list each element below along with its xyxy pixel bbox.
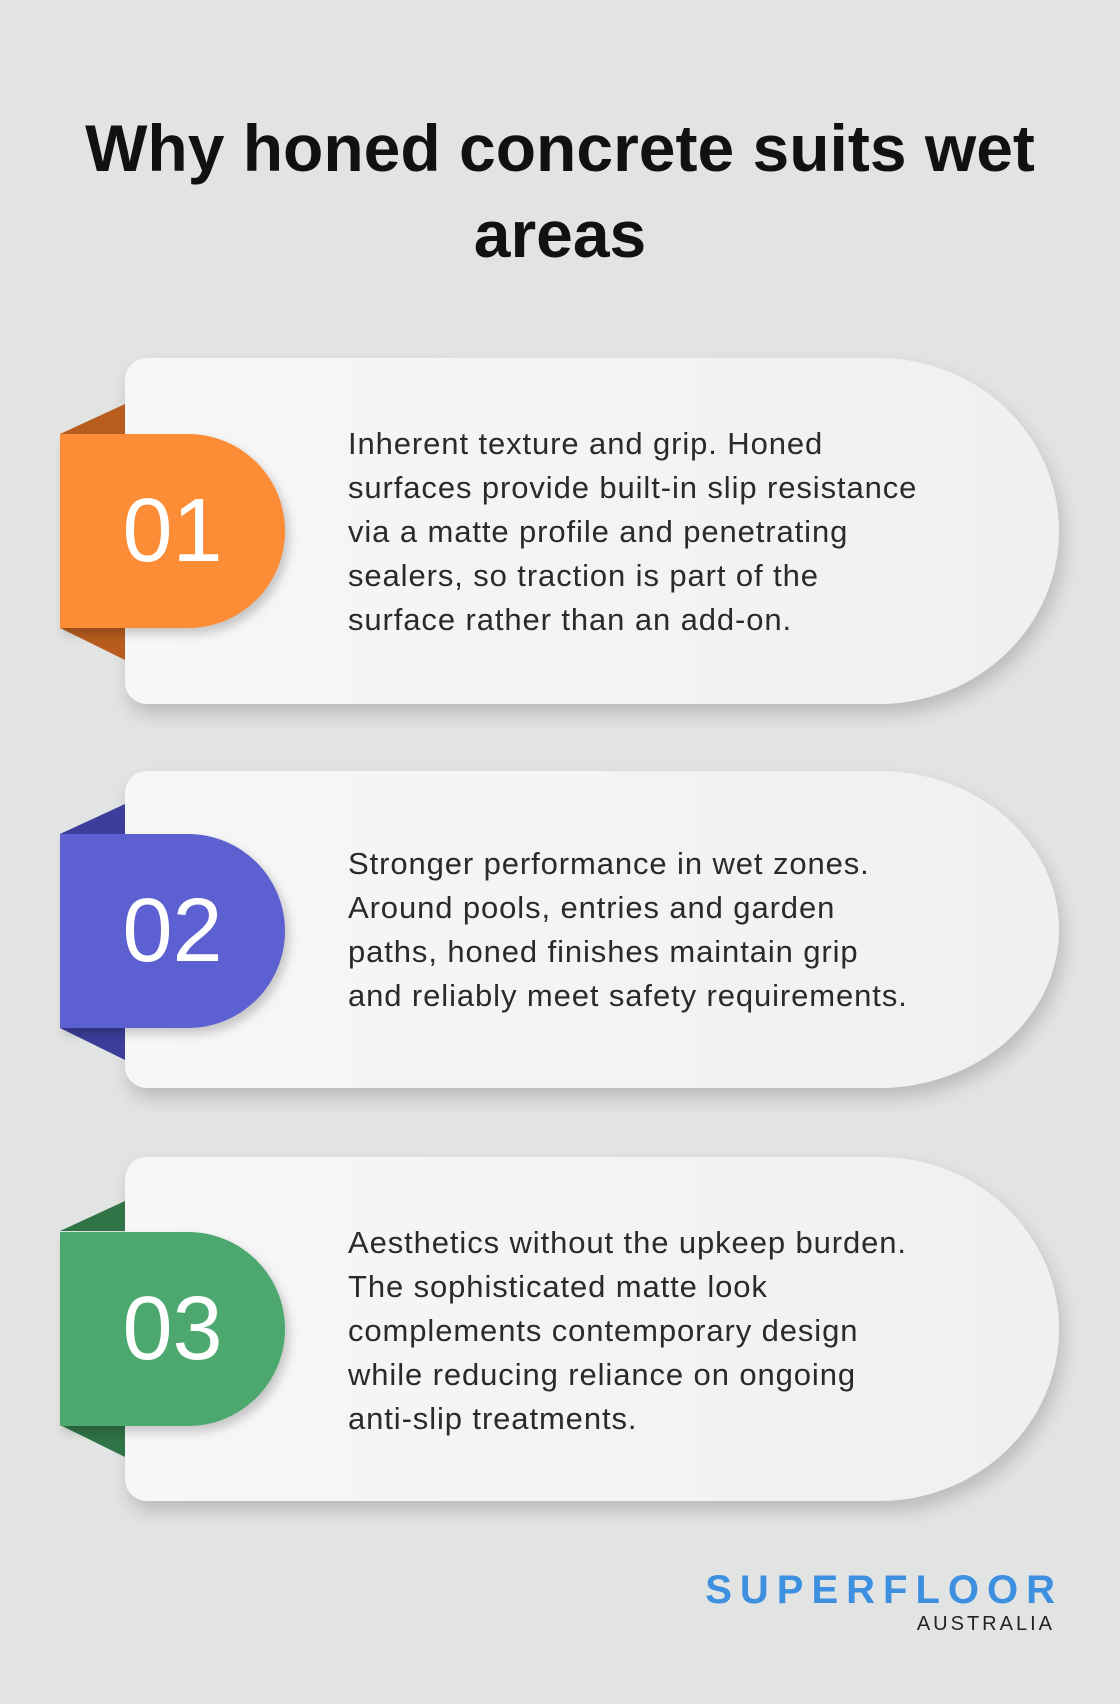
badge: 01 xyxy=(60,434,285,628)
logo xyxy=(705,1568,1063,1635)
badge: 02 xyxy=(60,834,285,1028)
text: item 3: Aesthetics without the upkeep burden. xyxy=(348,1225,907,1260)
text: item 2: Stronger performance in wet zones. xyxy=(348,846,870,881)
panel: item 2 xyxy=(125,771,1059,1088)
title: Why honed concrete suits wet xyxy=(85,111,1035,185)
badge: 01: 01 xyxy=(122,481,223,581)
text: item 1: via a matte profile and penetrating xyxy=(348,514,848,549)
text: item 2: paths, honed finishes maintain grip xyxy=(348,934,859,969)
title xyxy=(85,111,1035,271)
panel: item 3 xyxy=(125,1157,1059,1501)
text: item 1: sealers, so traction is part of the xyxy=(348,558,819,593)
text: item 3: anti-slip treatments. xyxy=(348,1401,637,1436)
text: item 2: Around pools, entries and garden xyxy=(348,890,835,925)
text: item 1: surfaces provide built-in slip resistance xyxy=(348,470,917,505)
logo: AUSTRALIA xyxy=(917,1613,1055,1635)
panel: item 1 xyxy=(125,358,1059,704)
fold: item 3 xyxy=(60,1201,125,1457)
logo: SUPERFLOOR xyxy=(705,1568,1063,1612)
text: item 3: while reducing reliance on ongoing xyxy=(348,1357,856,1392)
text: item 1: Inherent texture and grip. Honed xyxy=(348,426,823,461)
text: item 3: complements contemporary design xyxy=(348,1313,858,1348)
text: item 2 xyxy=(348,846,908,1013)
fold: item 1 xyxy=(60,404,125,660)
text: item 1 xyxy=(348,426,917,637)
badge: 03 xyxy=(60,1232,285,1426)
title: areas xyxy=(474,197,646,271)
badge: 03: 03 xyxy=(122,1279,223,1379)
fold: item 2 xyxy=(60,804,125,1060)
text: item 3 xyxy=(348,1225,907,1436)
badge: 02: 02 xyxy=(122,881,223,981)
text: item 2: and reliably meet safety requirements. xyxy=(348,978,908,1013)
text: item 3: The sophisticated matte look xyxy=(348,1269,768,1304)
text: item 1: surface rather than an add-on. xyxy=(348,602,792,637)
